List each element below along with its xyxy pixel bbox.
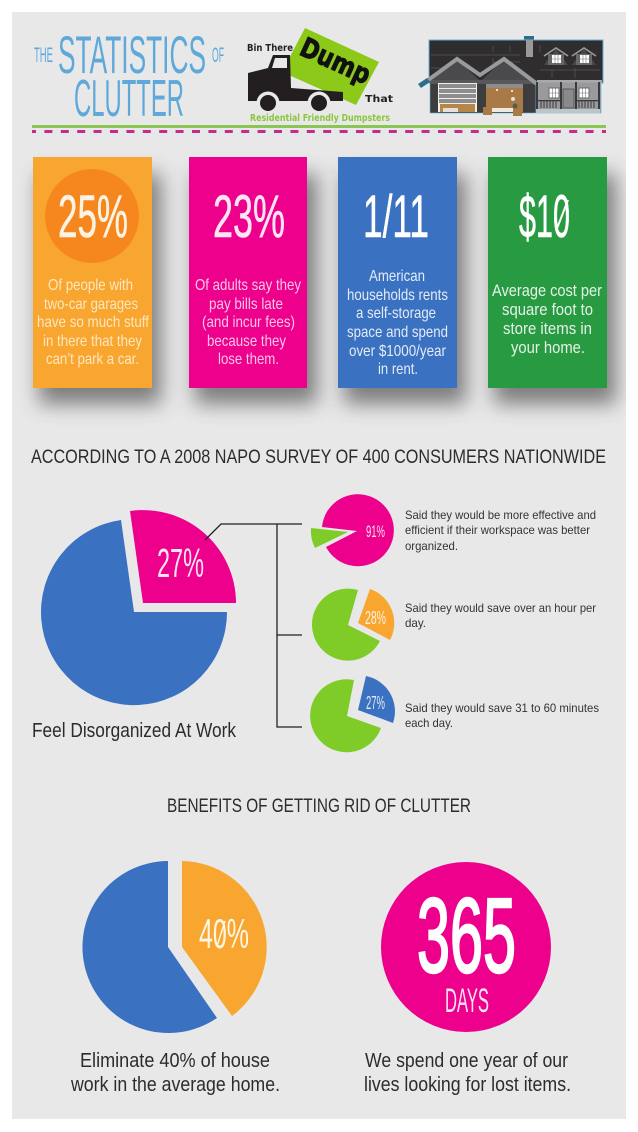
text: 91% description — [405, 508, 596, 553]
text: 27% description — [405, 701, 599, 730]
pie caption: Feel Disorganized At Work — [32, 720, 237, 742]
panel: 23% stat card: (and incur fees) — [202, 314, 295, 331]
text: 28% description: day. — [405, 616, 426, 630]
logo: Bin There Dump That truck — [247, 28, 393, 124]
chart: 27% small pie: 27% — [366, 693, 385, 713]
panel: $10 stat card: Average cost per — [492, 281, 602, 300]
text: OF — [212, 44, 224, 67]
text: 27% description: each day. — [405, 716, 453, 730]
badge: 365 days: 365 — [417, 877, 516, 995]
chart: 40% housework pie: 40% — [199, 910, 249, 957]
logo: Bin There Dump That truck: That — [365, 94, 393, 105]
chart: 27% small pie — [310, 676, 395, 752]
connector lines from pie to sub-charts — [205, 524, 302, 727]
icon: orange circle behind number — [45, 169, 139, 263]
panel: 1/11 stat card: 1/11 — [363, 183, 429, 250]
panel: $10 stat card: square foot to — [502, 300, 593, 319]
chart: 28% pie — [312, 589, 394, 661]
panel: 25% stat card — [33, 157, 152, 388]
text: 27% description: Said they would save 31 to 60 minutes — [405, 701, 599, 715]
panel: $10 stat card: your home. — [511, 338, 585, 357]
logo: Bin There Dump That truck: Bin There — [247, 43, 293, 54]
panel: 23% stat card: because they — [207, 333, 286, 350]
text: housework caption: work in the average home. — [70, 1074, 280, 1096]
panel: $10 stat card: store items in — [503, 319, 592, 338]
text: housework caption — [70, 1050, 280, 1096]
chart: 27% feel disorganized pie — [41, 510, 236, 705]
panel: $10 stat card — [488, 157, 607, 388]
chart: 40% housework pie — [82, 861, 267, 1033]
title — [34, 26, 224, 128]
panel: 23% stat card: Of adults say they — [195, 277, 301, 294]
pink dashed divider — [32, 130, 606, 133]
text: 91% description: efficient if their workspace was better — [405, 523, 590, 537]
panel: 23% stat card — [189, 157, 307, 388]
panel: 25% stat card: two-car garages — [44, 296, 138, 313]
card shadows — [39, 174, 616, 404]
chart: 91% pie: 91% — [366, 522, 385, 541]
text: lost items caption — [364, 1050, 571, 1096]
text: 28% description — [405, 601, 596, 630]
panel: 23% stat card: lose them. — [218, 351, 279, 368]
heading: benefits: BENEFITS OF GETTING RID OF CLUTTER — [167, 796, 471, 817]
chart: 28% pie: 28% — [365, 608, 386, 628]
panel: 25% stat card: can’t park a car. — [46, 351, 139, 368]
panel: 1/11 stat card: a self-storage — [356, 305, 436, 322]
panel: 25% stat card: in there that they — [43, 333, 142, 350]
panel: 25% stat card: have so much stuff — [37, 314, 149, 331]
panel: $10 stat card: $10 — [519, 183, 570, 250]
panel: 25% stat card: Of people with — [48, 277, 133, 294]
text: 91% description: Said they would be more effective and — [405, 508, 596, 522]
title: THE — [34, 44, 53, 67]
text: 91% description: organized. — [405, 539, 458, 553]
text: lost items caption: lives looking for lost items. — [364, 1074, 571, 1096]
panel: 23% stat card: 23% — [213, 183, 285, 250]
panel: 1/11 stat card: households rents — [347, 287, 448, 304]
panel: 1/11 stat card: American — [369, 268, 425, 285]
panel: 1/11 stat card: space and spend — [347, 324, 448, 341]
title: CLUTTER — [74, 70, 184, 128]
text: 28% description: Said they would save over an hour per — [405, 601, 596, 615]
panel: 1/11 stat card: over $1000/year — [349, 343, 447, 360]
badge: 365 days — [381, 862, 551, 1032]
chart: 27% feel disorganized pie: 27% — [157, 540, 204, 586]
green divider line — [32, 125, 606, 128]
logo: Bin There Dump That truck: Dump — [295, 32, 375, 91]
panel: 1/11 stat card: in rent. — [378, 361, 418, 378]
panel: 1/11 stat card — [338, 157, 457, 388]
chart: 91% pie — [311, 494, 394, 566]
panel: 23% stat card: pay bills late — [209, 296, 283, 313]
panel: 25% stat card: 25% — [58, 183, 128, 250]
text: lost items caption: We spend one year of our — [365, 1050, 568, 1072]
logo: Bin There Dump That truck: Residential Friendly Dumpsters — [250, 113, 390, 124]
title: STATISTICS — [58, 26, 206, 85]
illustration: house with cluttered garage — [418, 36, 603, 116]
text: housework caption: Eliminate 40% of house — [80, 1050, 270, 1072]
badge: 365 days: DAYS — [445, 982, 489, 1020]
